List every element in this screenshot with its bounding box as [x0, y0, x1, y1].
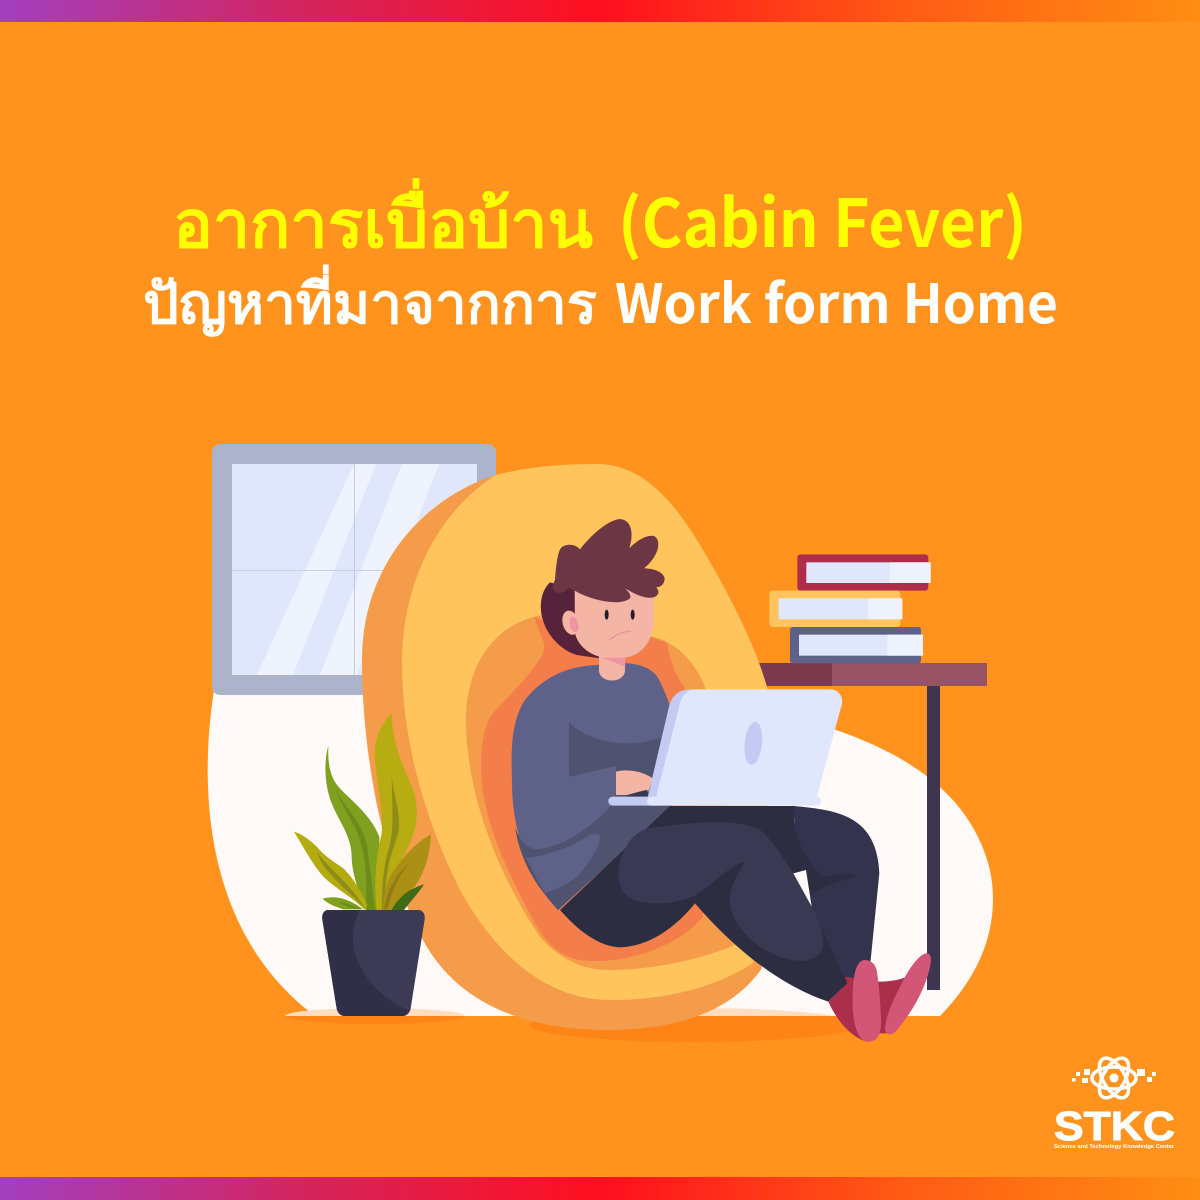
top gradient bar	[0, 0, 1200, 22]
logo wordmark: STKC	[1054, 1103, 1175, 1149]
subtitle	[143, 260, 1058, 339]
floor shadows	[285, 1008, 860, 1042]
plant pot	[322, 910, 425, 1016]
subtitle: ปัญหาที่มาจากการ	[143, 264, 597, 337]
legs	[560, 806, 879, 1002]
slippers	[828, 953, 931, 1042]
stack of books	[769, 554, 931, 663]
bottom gradient bar	[0, 1177, 1200, 1200]
laptop	[608, 689, 842, 806]
logo atom icon	[1072, 1053, 1156, 1103]
egg chair	[362, 464, 775, 1030]
title: (Cabin Fever)	[618, 171, 1027, 267]
subtitle: Work form Home	[615, 260, 1058, 339]
title: อาการเบื่อบ้าน	[173, 177, 593, 261]
logo tagline: Science and Technology Knowledge Center	[1054, 1144, 1175, 1150]
title	[173, 171, 1027, 267]
sweater	[512, 663, 677, 910]
plant	[294, 713, 431, 910]
head	[541, 519, 665, 680]
person	[512, 519, 931, 1042]
hand	[616, 770, 653, 797]
white background blob	[208, 690, 993, 1016]
STKC logo	[1054, 1053, 1175, 1150]
desk	[745, 663, 987, 990]
window	[212, 444, 496, 695]
